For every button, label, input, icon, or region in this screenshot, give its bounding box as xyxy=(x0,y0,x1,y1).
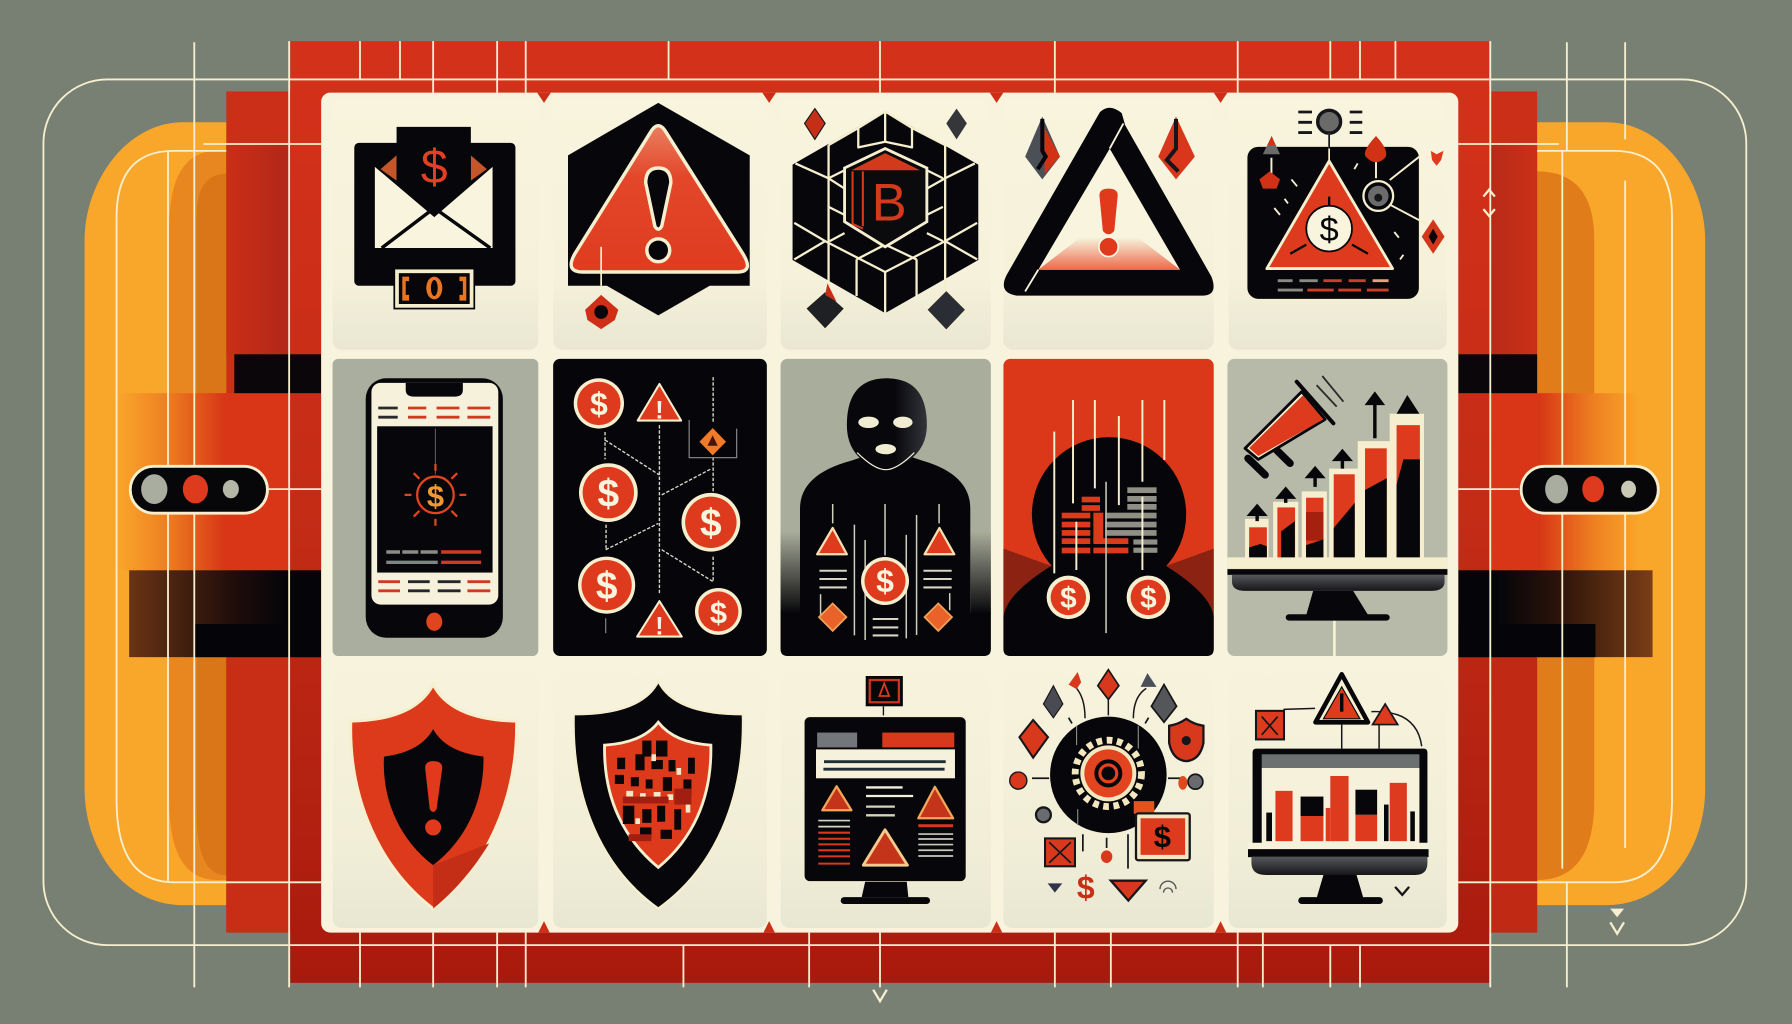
coin 4: $ xyxy=(596,565,618,608)
coin 3: $ xyxy=(700,502,722,545)
icon: network warning screen xyxy=(1247,110,1445,299)
icon: megaphone xyxy=(1245,376,1343,475)
pill: right indicator xyxy=(1521,466,1658,513)
coin 1: $ xyxy=(590,386,608,422)
icon: envelope with dollar: $ xyxy=(421,141,448,194)
panel: masked fraudster card: $ xyxy=(876,563,894,599)
icon: blockchain cube with bitcoin shield xyxy=(793,109,978,330)
coin 2 xyxy=(579,463,638,522)
panel: dollar flow card xyxy=(553,359,767,656)
bars xyxy=(1245,395,1424,560)
icon: black shield with mosaic xyxy=(574,681,743,909)
panel: yellow rounded backing xyxy=(85,122,1705,905)
panel: phone card xyxy=(333,359,538,656)
panel: phone card: $ xyxy=(427,478,444,513)
icon: gear and risk network: $ xyxy=(1154,819,1171,854)
panel: falling money card: $ xyxy=(1060,582,1077,615)
icon: gear and risk network: $ xyxy=(1077,869,1095,905)
icon: warning monitor with bars xyxy=(1248,674,1429,904)
icon: envelope with dollar xyxy=(354,127,515,309)
coin 5: $ xyxy=(710,595,727,630)
panel: falling money card: $ xyxy=(1140,582,1157,615)
icon: gear and risk network xyxy=(1010,670,1203,905)
icon: red shield with exclamation xyxy=(351,685,517,909)
panel: red top and bottom band xyxy=(290,41,1489,983)
icon: hexagon warning triangle xyxy=(568,103,750,329)
small chevrons and link glyph xyxy=(873,190,1624,1001)
icon: warning triangle outline xyxy=(1004,108,1214,296)
coin 1 xyxy=(574,378,624,429)
coin 4 xyxy=(578,557,635,614)
arrows xyxy=(1250,394,1382,521)
pill: left indicator xyxy=(130,466,267,513)
warning triangle lower: ! xyxy=(655,612,664,640)
warning triangle upper xyxy=(638,384,681,424)
warning triangle lower xyxy=(637,601,682,640)
coin 2: $ xyxy=(598,472,620,515)
coin 5 xyxy=(695,588,742,635)
icon: network warning screen: $ xyxy=(1320,211,1339,249)
warning triangle upper: ! xyxy=(655,396,664,424)
black bars xyxy=(129,354,1653,657)
panel: falling money card xyxy=(1003,359,1214,656)
icon: blockchain cube with bitcoin shield: B xyxy=(872,174,907,233)
panel: rising chart and megaphone card xyxy=(1227,359,1447,656)
panel: masked fraudster card xyxy=(781,359,991,656)
panel: cream board xyxy=(321,93,1458,933)
coin 3 xyxy=(681,493,740,552)
panel: red side block xyxy=(226,91,1537,933)
icon: desktop alert screen xyxy=(804,676,966,904)
